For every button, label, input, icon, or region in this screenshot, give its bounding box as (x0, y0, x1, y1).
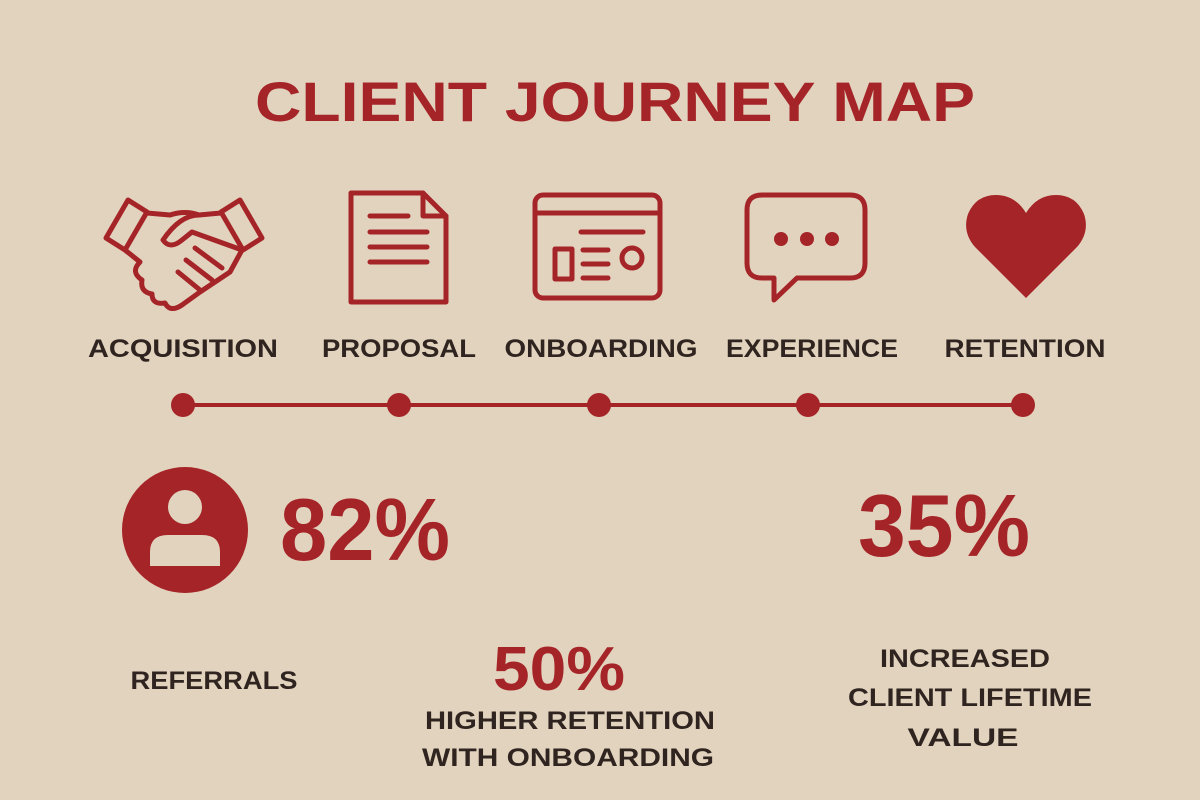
icon: onboarding window (535, 195, 660, 298)
icon: speech bubble (747, 195, 865, 300)
icon: person circle (122, 467, 248, 593)
stage labels: ONBOARDING (504, 335, 698, 363)
stat: 35%: 35% (858, 476, 1030, 575)
label: increased client lifetime value: INCREASED (880, 645, 1050, 673)
stage labels: PROPOSAL (322, 335, 476, 363)
timeline (171, 393, 1035, 417)
icon: heart (966, 195, 1086, 298)
stage labels: RETENTION (944, 335, 1106, 363)
label: increased client lifetime value: VALUE (908, 724, 1018, 752)
icon: handshake (106, 200, 262, 309)
stage labels: ACQUISITION (88, 335, 278, 363)
label: referrals: REFERRALS (130, 667, 298, 695)
stat: 82%: 82% (280, 480, 450, 579)
icon: document (351, 193, 446, 302)
stat: 50%: 50% (493, 635, 625, 704)
title: CLIENT JOURNEY MAP (255, 70, 975, 133)
label: higher retention: WITH ONBOARDING (422, 744, 714, 772)
label: increased client lifetime value: CLIENT LIFETIME (848, 684, 1092, 712)
label: higher retention (422, 707, 715, 772)
stage labels: EXPERIENCE (726, 335, 898, 363)
label: higher retention: HIGHER RETENTION (425, 707, 715, 735)
label: increased client lifetime value (848, 645, 1092, 752)
stage labels (88, 335, 1106, 363)
